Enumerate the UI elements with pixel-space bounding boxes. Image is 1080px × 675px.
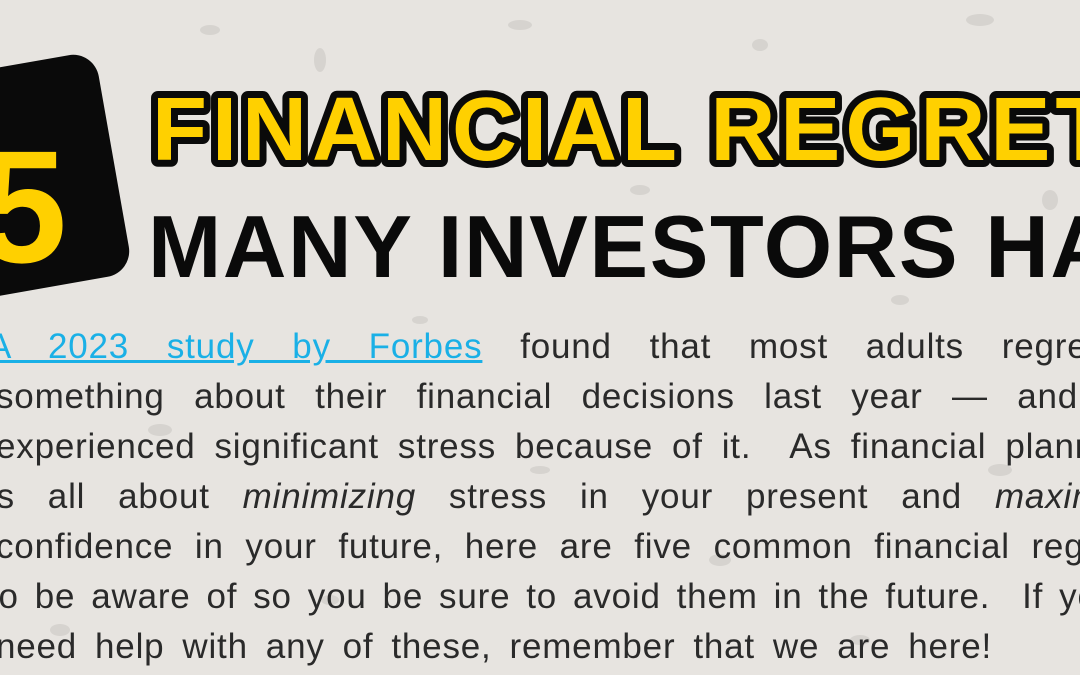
badge: number 5	[0, 54, 130, 296]
intro paragraph: something about their financial decisions last year — and	[0, 377, 1078, 416]
intro paragraph: A 2023 study by Forbes found that most adults regret	[0, 327, 1080, 366]
title	[148, 80, 1080, 296]
intro paragraph: need help with any of these, remember that we are here!	[0, 627, 992, 666]
